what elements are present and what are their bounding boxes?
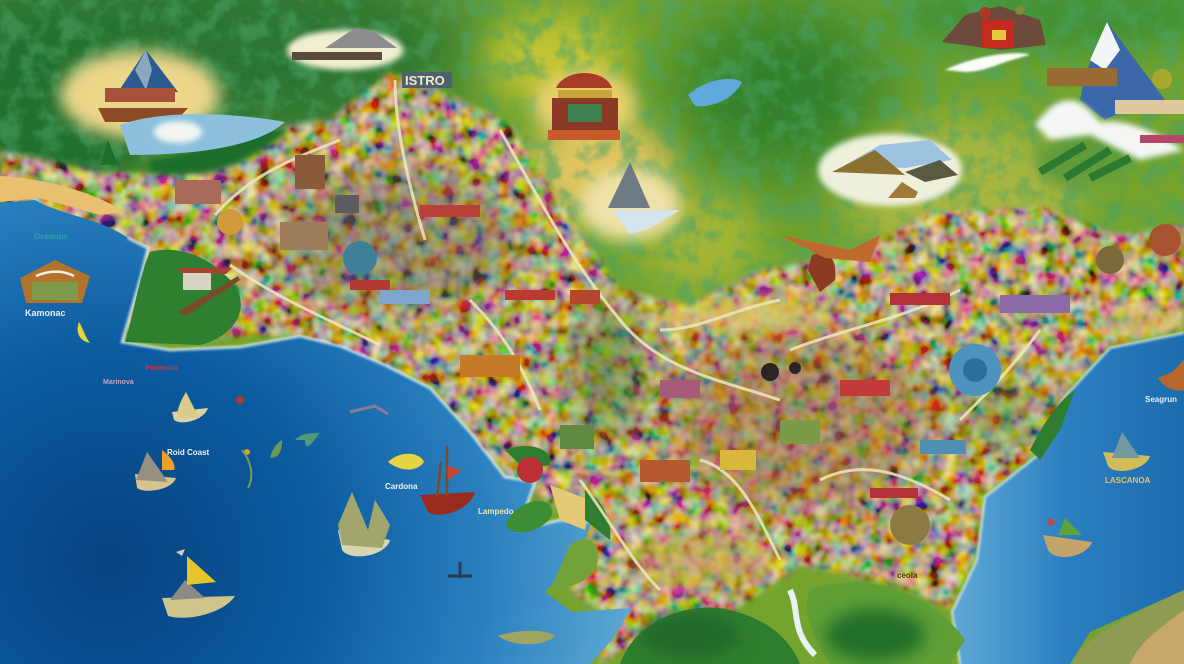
sea labels: LASCANOA bbox=[1105, 476, 1151, 485]
green lowlands in the south bbox=[505, 390, 1075, 664]
beach strip on the west coast bbox=[0, 176, 125, 215]
mountain valley band of green bbox=[150, 128, 290, 175]
west sea bbox=[0, 200, 632, 664]
small island south bbox=[498, 631, 555, 644]
boat: east, yellow bbox=[1103, 432, 1150, 471]
vignette: snowy blue mountain bbox=[1030, 22, 1184, 185]
sea labels: Marinova bbox=[103, 379, 134, 386]
sea labels: Seagrun bbox=[1145, 395, 1177, 404]
sea labels: Peninsula bbox=[145, 365, 178, 372]
vignette: grey mountain range bbox=[287, 28, 403, 70]
boat: green sails bbox=[338, 492, 390, 556]
southeast land corner bbox=[1072, 590, 1184, 664]
vignette: grey peak island bbox=[580, 162, 680, 240]
green peninsula bbox=[125, 250, 241, 345]
vignette: mountain lake landscape bbox=[818, 134, 962, 206]
vignette: blue lake bbox=[688, 79, 742, 106]
boat: small pale sail bbox=[172, 392, 208, 422]
boat: east edge, red bbox=[1158, 360, 1184, 391]
vignette: red fortress on snow bbox=[942, 5, 1046, 72]
vignette: dark rock formation bbox=[808, 253, 835, 292]
yellow fish bbox=[78, 322, 90, 343]
sea labels: ceola bbox=[897, 571, 918, 580]
sea labels: Roid Coast bbox=[167, 448, 210, 457]
sea labels bbox=[103, 365, 1177, 580]
yellow fish offshore bbox=[388, 454, 424, 470]
boat: orange sail bbox=[135, 450, 176, 491]
orange sweep bbox=[780, 235, 880, 262]
coastal foam bbox=[122, 238, 592, 530]
sea labels: Cardona bbox=[385, 482, 418, 491]
small sea creatures bbox=[236, 396, 472, 578]
boat: east, green flag bbox=[1043, 518, 1092, 557]
title sign: ISTRO bbox=[405, 73, 445, 88]
label: west coast emblem bbox=[20, 260, 90, 303]
sea labels: Lampedo bbox=[478, 507, 514, 516]
boat: yellow sail, bottom left bbox=[162, 549, 235, 618]
boat: red hull bbox=[420, 446, 475, 515]
vignette: volcano camp bbox=[60, 50, 285, 165]
vignette: red pavilion bbox=[533, 69, 637, 141]
sea label: Kamonac: Kamonac bbox=[25, 308, 66, 318]
sea label: upper left: Oceanus bbox=[34, 232, 68, 241]
small colourful landmark blocks bbox=[175, 155, 1181, 545]
east sea bbox=[952, 333, 1184, 664]
roads network bbox=[215, 80, 1040, 590]
